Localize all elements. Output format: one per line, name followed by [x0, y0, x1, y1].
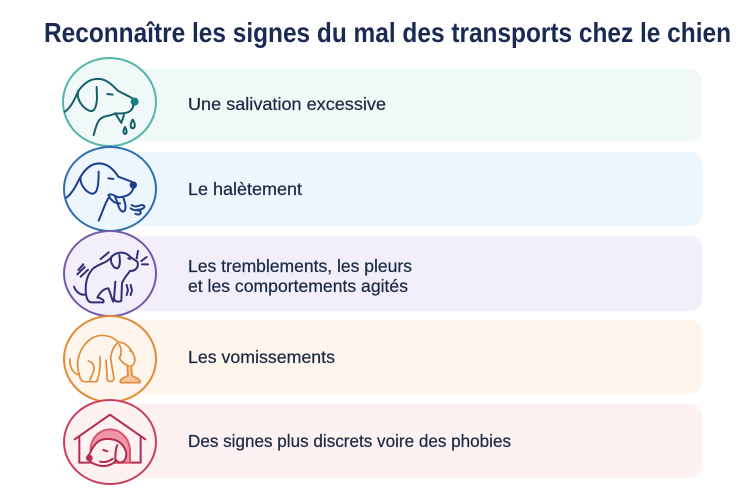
panel: tremblements — [130, 236, 702, 311]
panel: vomissements — [130, 320, 702, 394]
icon: dog in kennel — [64, 400, 156, 484]
icon: dog vomiting — [64, 316, 156, 402]
panel: signes discrets — [130, 404, 702, 478]
label: tremblements: Les tremblements, les pleurs — [188, 256, 412, 276]
label: signes discrets: Des signes plus discrets voire des phobies — [188, 431, 511, 451]
icon: dog panting — [64, 147, 156, 231]
label: vomissements: Les vomissements — [188, 347, 335, 367]
label: halètement: Le halètement — [188, 179, 302, 199]
label: salivation: Une salivation excessive — [188, 94, 386, 114]
icon: dog drooling — [63, 58, 156, 146]
panel: halètement — [130, 152, 702, 226]
label: tremblements: et les comportements agités — [188, 276, 408, 296]
panel: salivation — [130, 69, 702, 141]
icon: dog trembling — [64, 231, 156, 316]
